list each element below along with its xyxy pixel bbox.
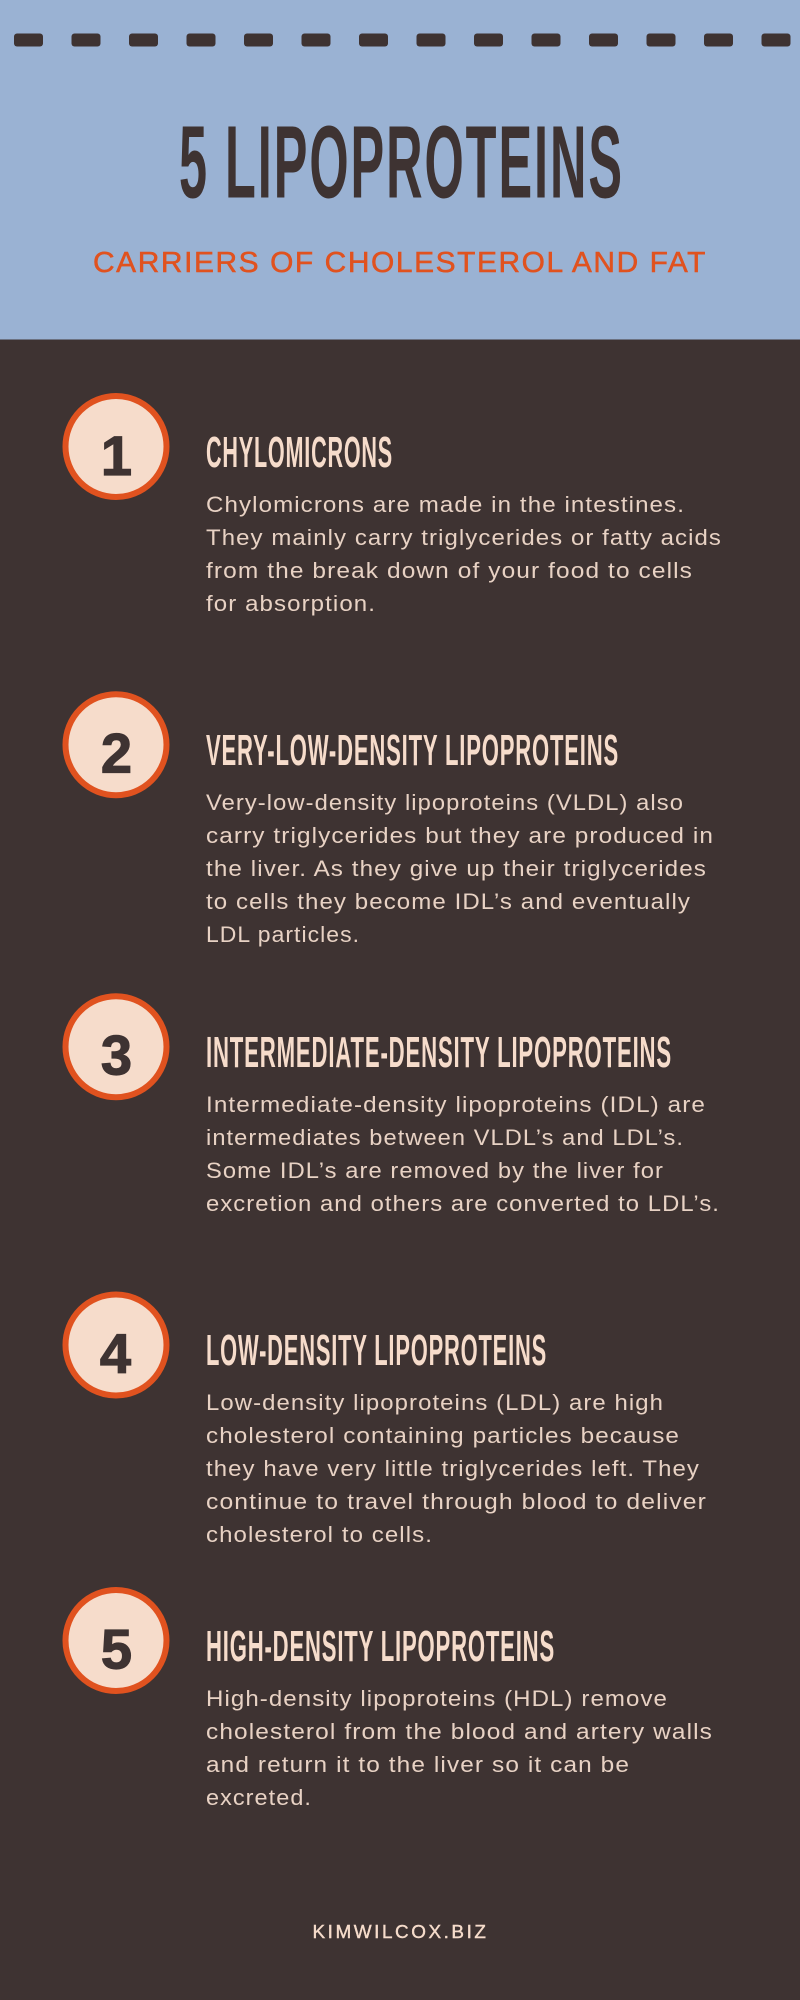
- panel: item 3 IDL: [66, 996, 720, 1216]
- description: chylomicrons: They mainly carry triglycerides or fatty acids: [206, 525, 722, 550]
- number badge 2: [66, 694, 166, 795]
- description: IDL: Intermediate-density lipoproteins (IDL) are: [206, 1092, 706, 1117]
- panel: item 1 chylomicrons: CHYLOMICRONS: [206, 429, 393, 477]
- description: IDL: excretion and others are converted to LDL’s.: [206, 1191, 720, 1216]
- description: LDL: they have very little triglycerides left. They: [206, 1456, 700, 1481]
- footer: website: KIMWILCOX.BIZ: [312, 1921, 488, 1942]
- number badge 1: [66, 396, 166, 497]
- description: VLDL: to cells they become IDL’s and eventually: [206, 889, 691, 914]
- description: HDL: High-density lipoproteins (HDL) remove: [206, 1686, 668, 1711]
- number badge 3: [66, 996, 166, 1097]
- description: chylomicrons: Chylomicrons are made in the intestines.: [206, 492, 685, 517]
- panel: item 4 LDL: [66, 1294, 707, 1547]
- number badge 2: 2: [101, 722, 132, 784]
- panel: header: [0, 0, 800, 340]
- number badge 1: 1: [101, 424, 132, 487]
- number badge 5: [66, 1590, 166, 1691]
- description: IDL: Some IDL’s are removed by the liver for: [206, 1158, 664, 1183]
- description: VLDL: Very-low-density lipoproteins (VLDL) also: [206, 790, 684, 815]
- description: VLDL: LDL particles.: [206, 922, 360, 947]
- description: VLDL: [206, 790, 714, 947]
- number badge 4: 4: [100, 1322, 131, 1385]
- description: LDL: continue to travel through blood to deliver: [206, 1489, 707, 1514]
- panel: item 2 VLDL: [66, 694, 714, 947]
- description: LDL: [206, 1390, 707, 1547]
- panel: item 5 HDL: [66, 1590, 713, 1810]
- description: LDL: cholesterol to cells.: [206, 1522, 433, 1547]
- panel: item 1 chylomicrons: [66, 396, 722, 616]
- description: chylomicrons: from the break down of your food to cells: [206, 558, 693, 583]
- description: HDL: excreted.: [206, 1785, 312, 1810]
- description: HDL: [206, 1686, 713, 1810]
- dashed stitched line: [14, 34, 790, 46]
- description: chylomicrons: [206, 492, 722, 616]
- subtitle: CARRIERS OF CHOLESTEROL AND FAT: [93, 247, 707, 279]
- description: VLDL: the liver. As they give up their triglycerides: [206, 856, 707, 881]
- number badge 3: 3: [101, 1024, 132, 1086]
- description: HDL: cholesterol from the blood and artery walls: [206, 1719, 713, 1744]
- description: IDL: [206, 1092, 720, 1216]
- description: chylomicrons: for absorption.: [206, 591, 376, 616]
- description: LDL: Low-density lipoproteins (LDL) are high: [206, 1390, 664, 1415]
- description: LDL: cholesterol containing particles because: [206, 1423, 680, 1448]
- description: VLDL: carry triglycerides but they are produced in: [206, 823, 714, 848]
- number badge 4: [66, 1294, 166, 1396]
- number badge 5: 5: [101, 1618, 132, 1680]
- description: IDL: intermediates between VLDL’s and LDL’s.: [206, 1125, 684, 1150]
- description: HDL: and return it to the liver so it can be: [206, 1752, 630, 1777]
